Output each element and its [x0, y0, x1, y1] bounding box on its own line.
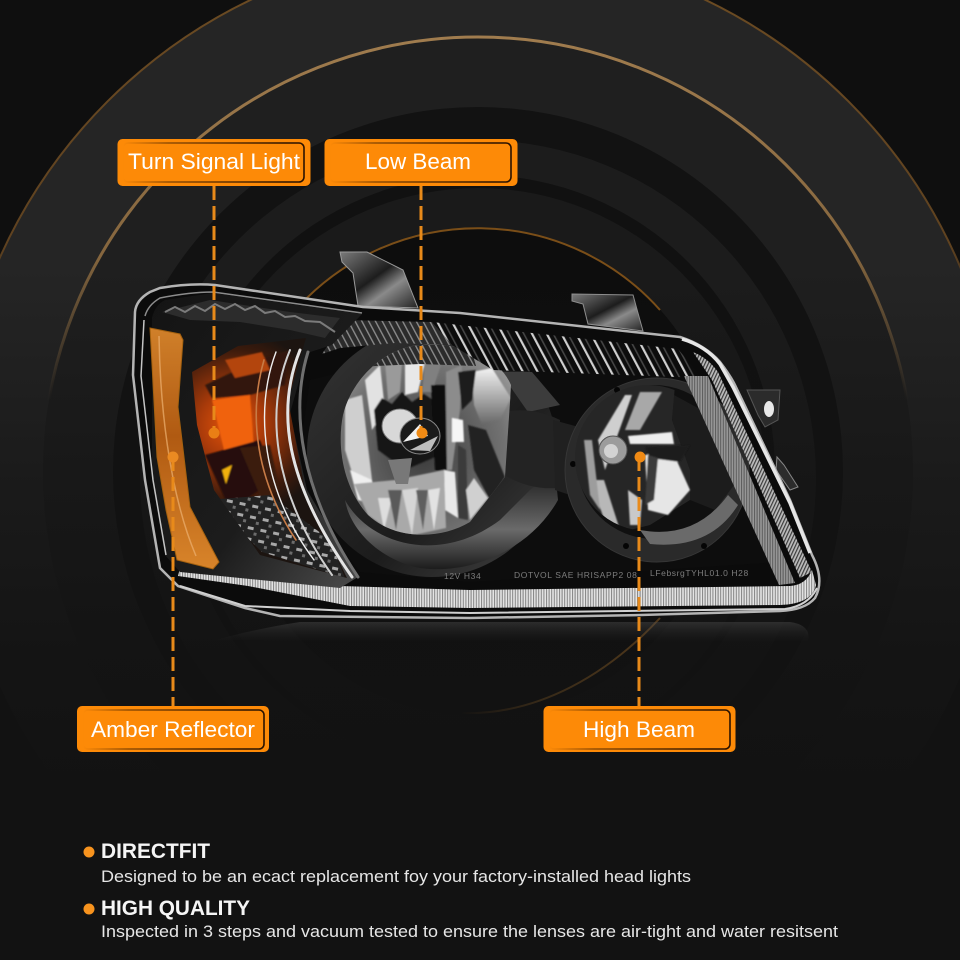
bottom chrome outer lip — [180, 586, 817, 613]
embossed lens text: DOTVOL SAE HRISAPP2 08 — [514, 570, 637, 580]
orange signal chamber — [192, 338, 347, 578]
ribbed top of reflector — [372, 345, 476, 366]
bulb — [599, 436, 627, 464]
bulb — [382, 409, 440, 484]
amber reflector — [150, 328, 219, 569]
low beam module — [307, 327, 560, 577]
right cone shading — [672, 395, 738, 510]
bullet — [84, 904, 94, 914]
mounting tab: middle — [572, 294, 643, 331]
callout line: turn signal light — [208, 186, 220, 438]
zig-zag black below chrome — [374, 392, 440, 470]
mounting tab: left — [340, 252, 418, 308]
description: Inspected in 3 steps and vacuum tested to ensure the lenses are air-tight and water resitsent — [101, 922, 838, 941]
dark bowl — [497, 410, 560, 488]
chrome right edge — [682, 339, 810, 553]
heading: HIGH QUALITY — [101, 897, 250, 920]
chrome curved streaks — [256, 350, 358, 577]
lower bowl highlight — [640, 495, 738, 545]
embossed lens text: 12V H34 — [444, 571, 481, 581]
dark cone — [577, 385, 731, 539]
lower fan — [354, 470, 446, 538]
callout line: amber reflector — [168, 452, 178, 706]
feature: high quality — [84, 897, 838, 941]
right grey shoulder — [500, 372, 560, 412]
callout line: high beam — [634, 452, 646, 706]
upper zig-zag rib band — [162, 300, 340, 338]
callout line: low beam — [416, 186, 428, 438]
small ribbed band left — [322, 320, 452, 354]
outer fine-rib band — [693, 352, 812, 578]
ring screw holes — [570, 387, 707, 549]
chrome reflector — [575, 385, 691, 530]
right ribbed side band — [684, 376, 795, 585]
lower checker glass — [220, 495, 344, 577]
label: Amber Reflector — [77, 706, 269, 752]
embossed lens text: LFebsrgTYHL01.0 H28 — [650, 568, 749, 578]
headlight assembly — [133, 252, 819, 618]
lens silhouette — [133, 284, 819, 618]
high beam module — [553, 378, 749, 562]
upper ribbed band — [432, 322, 702, 378]
outer ring — [307, 327, 557, 577]
matte housing plate — [300, 352, 780, 582]
lower crescent — [345, 470, 558, 569]
bullet — [84, 846, 94, 858]
label: Low Beam — [324, 139, 518, 186]
turn signal lens — [141, 293, 362, 588]
heading: DIRECTFIT — [101, 840, 210, 863]
chrome reflector — [340, 344, 511, 535]
chrome left edge inner line — [145, 292, 362, 316]
bracket arm between beams — [553, 420, 590, 500]
label: Turn Signal Light: Turn Signal Light — [128, 149, 300, 174]
mounting tab: right with hole — [747, 390, 798, 490]
lamp reflection — [215, 622, 809, 642]
description: Designed to be an ecact replacement foy your factory-installed head lights — [101, 867, 691, 886]
clear corner lens — [152, 293, 362, 588]
label: High Beam: High Beam — [583, 717, 695, 742]
label: Amber Reflector: Amber Reflector — [91, 717, 255, 742]
label: Turn Signal Light — [118, 139, 310, 186]
upper zig-zag edge — [165, 304, 335, 332]
label: High Beam — [544, 706, 736, 752]
embossed lens text — [444, 568, 749, 581]
label: Low Beam: Low Beam — [365, 149, 471, 174]
outer ring — [565, 378, 749, 562]
feature: direct fit — [84, 840, 691, 886]
lower chrome strip — [178, 568, 816, 608]
side chrome edges — [141, 320, 166, 555]
